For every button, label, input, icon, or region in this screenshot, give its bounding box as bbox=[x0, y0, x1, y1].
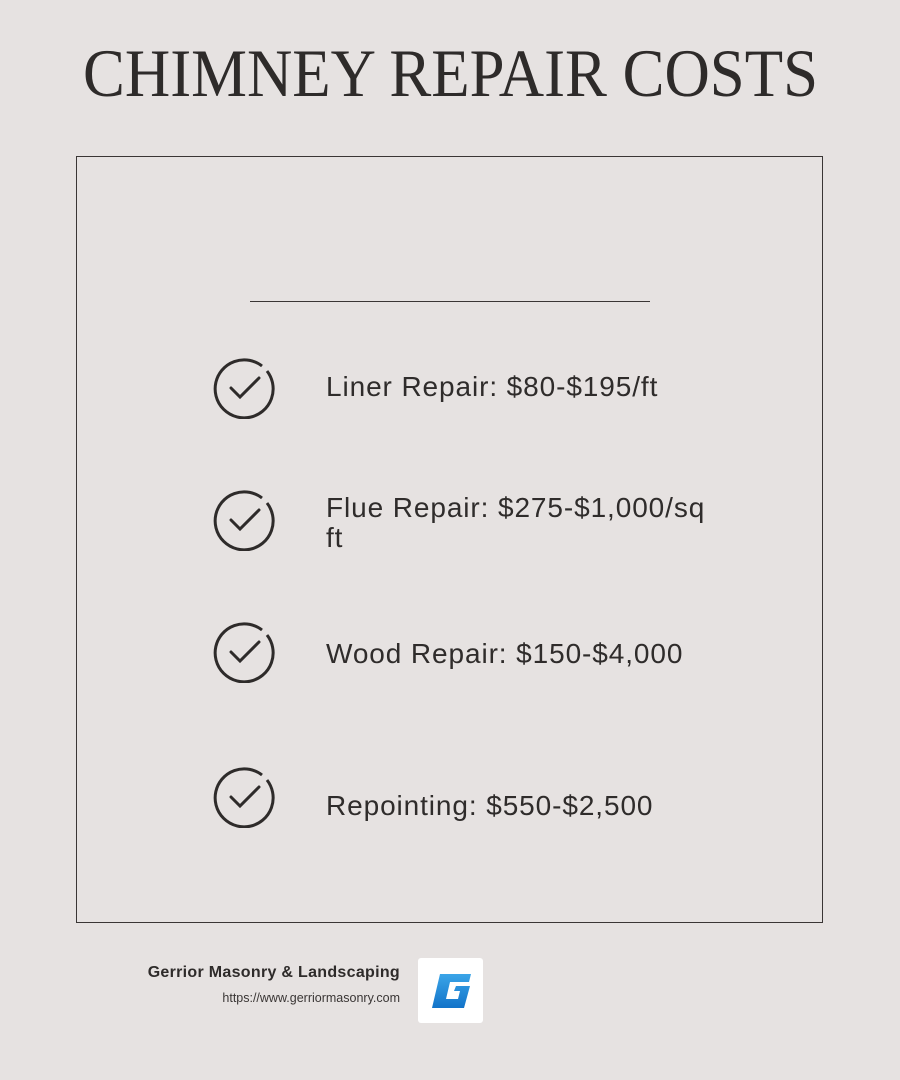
text: liner repair: Liner Repair: $80-$195/ft bbox=[326, 371, 658, 402]
text: flue repair: Flue Repair: $275-$1,000/sq bbox=[326, 492, 705, 523]
panel: cost list bbox=[76, 156, 823, 923]
text: wood repair: Wood Repair: $150-$4,000 bbox=[326, 638, 683, 669]
icon: check 1 bbox=[214, 358, 275, 419]
icon: check 3 bbox=[214, 622, 275, 683]
text: flue repair: ft bbox=[326, 522, 343, 553]
divider line bbox=[250, 301, 650, 302]
logo bbox=[418, 958, 483, 1023]
footer: company bbox=[148, 964, 400, 1005]
icon: check 2 bbox=[214, 490, 275, 551]
text: repointing: Repointing: $550-$2,500 bbox=[326, 790, 653, 821]
text: flue repair bbox=[326, 492, 705, 553]
footer: company: https://www.gerriormasonry.com bbox=[222, 991, 400, 1005]
title: CHIMNEY REPAIR COSTS bbox=[83, 35, 818, 111]
footer: company: Gerrior Masonry & Landscaping bbox=[148, 964, 400, 981]
icon: check 4 bbox=[214, 767, 275, 828]
